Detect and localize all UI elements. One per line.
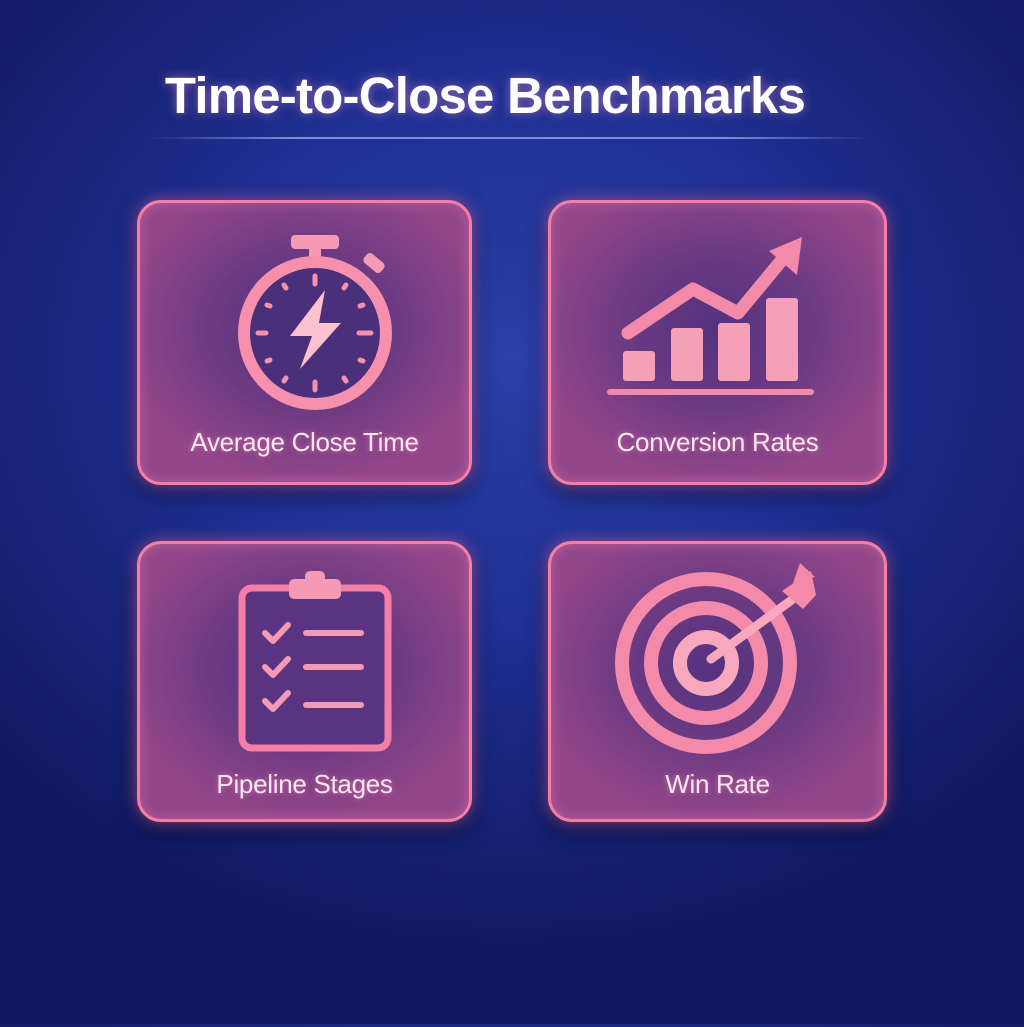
title: Time-to-Close Benchmarks — [165, 67, 805, 124]
label: Average Close Time — [190, 427, 419, 457]
panel: conversion rates — [548, 200, 887, 485]
label: Pipeline Stages — [216, 769, 393, 799]
panel: win rate — [548, 541, 887, 822]
label: Win Rate — [665, 769, 770, 799]
label: Conversion Rates — [617, 427, 818, 457]
panel: average close time — [137, 200, 472, 485]
panel: pipeline stages — [137, 541, 472, 822]
